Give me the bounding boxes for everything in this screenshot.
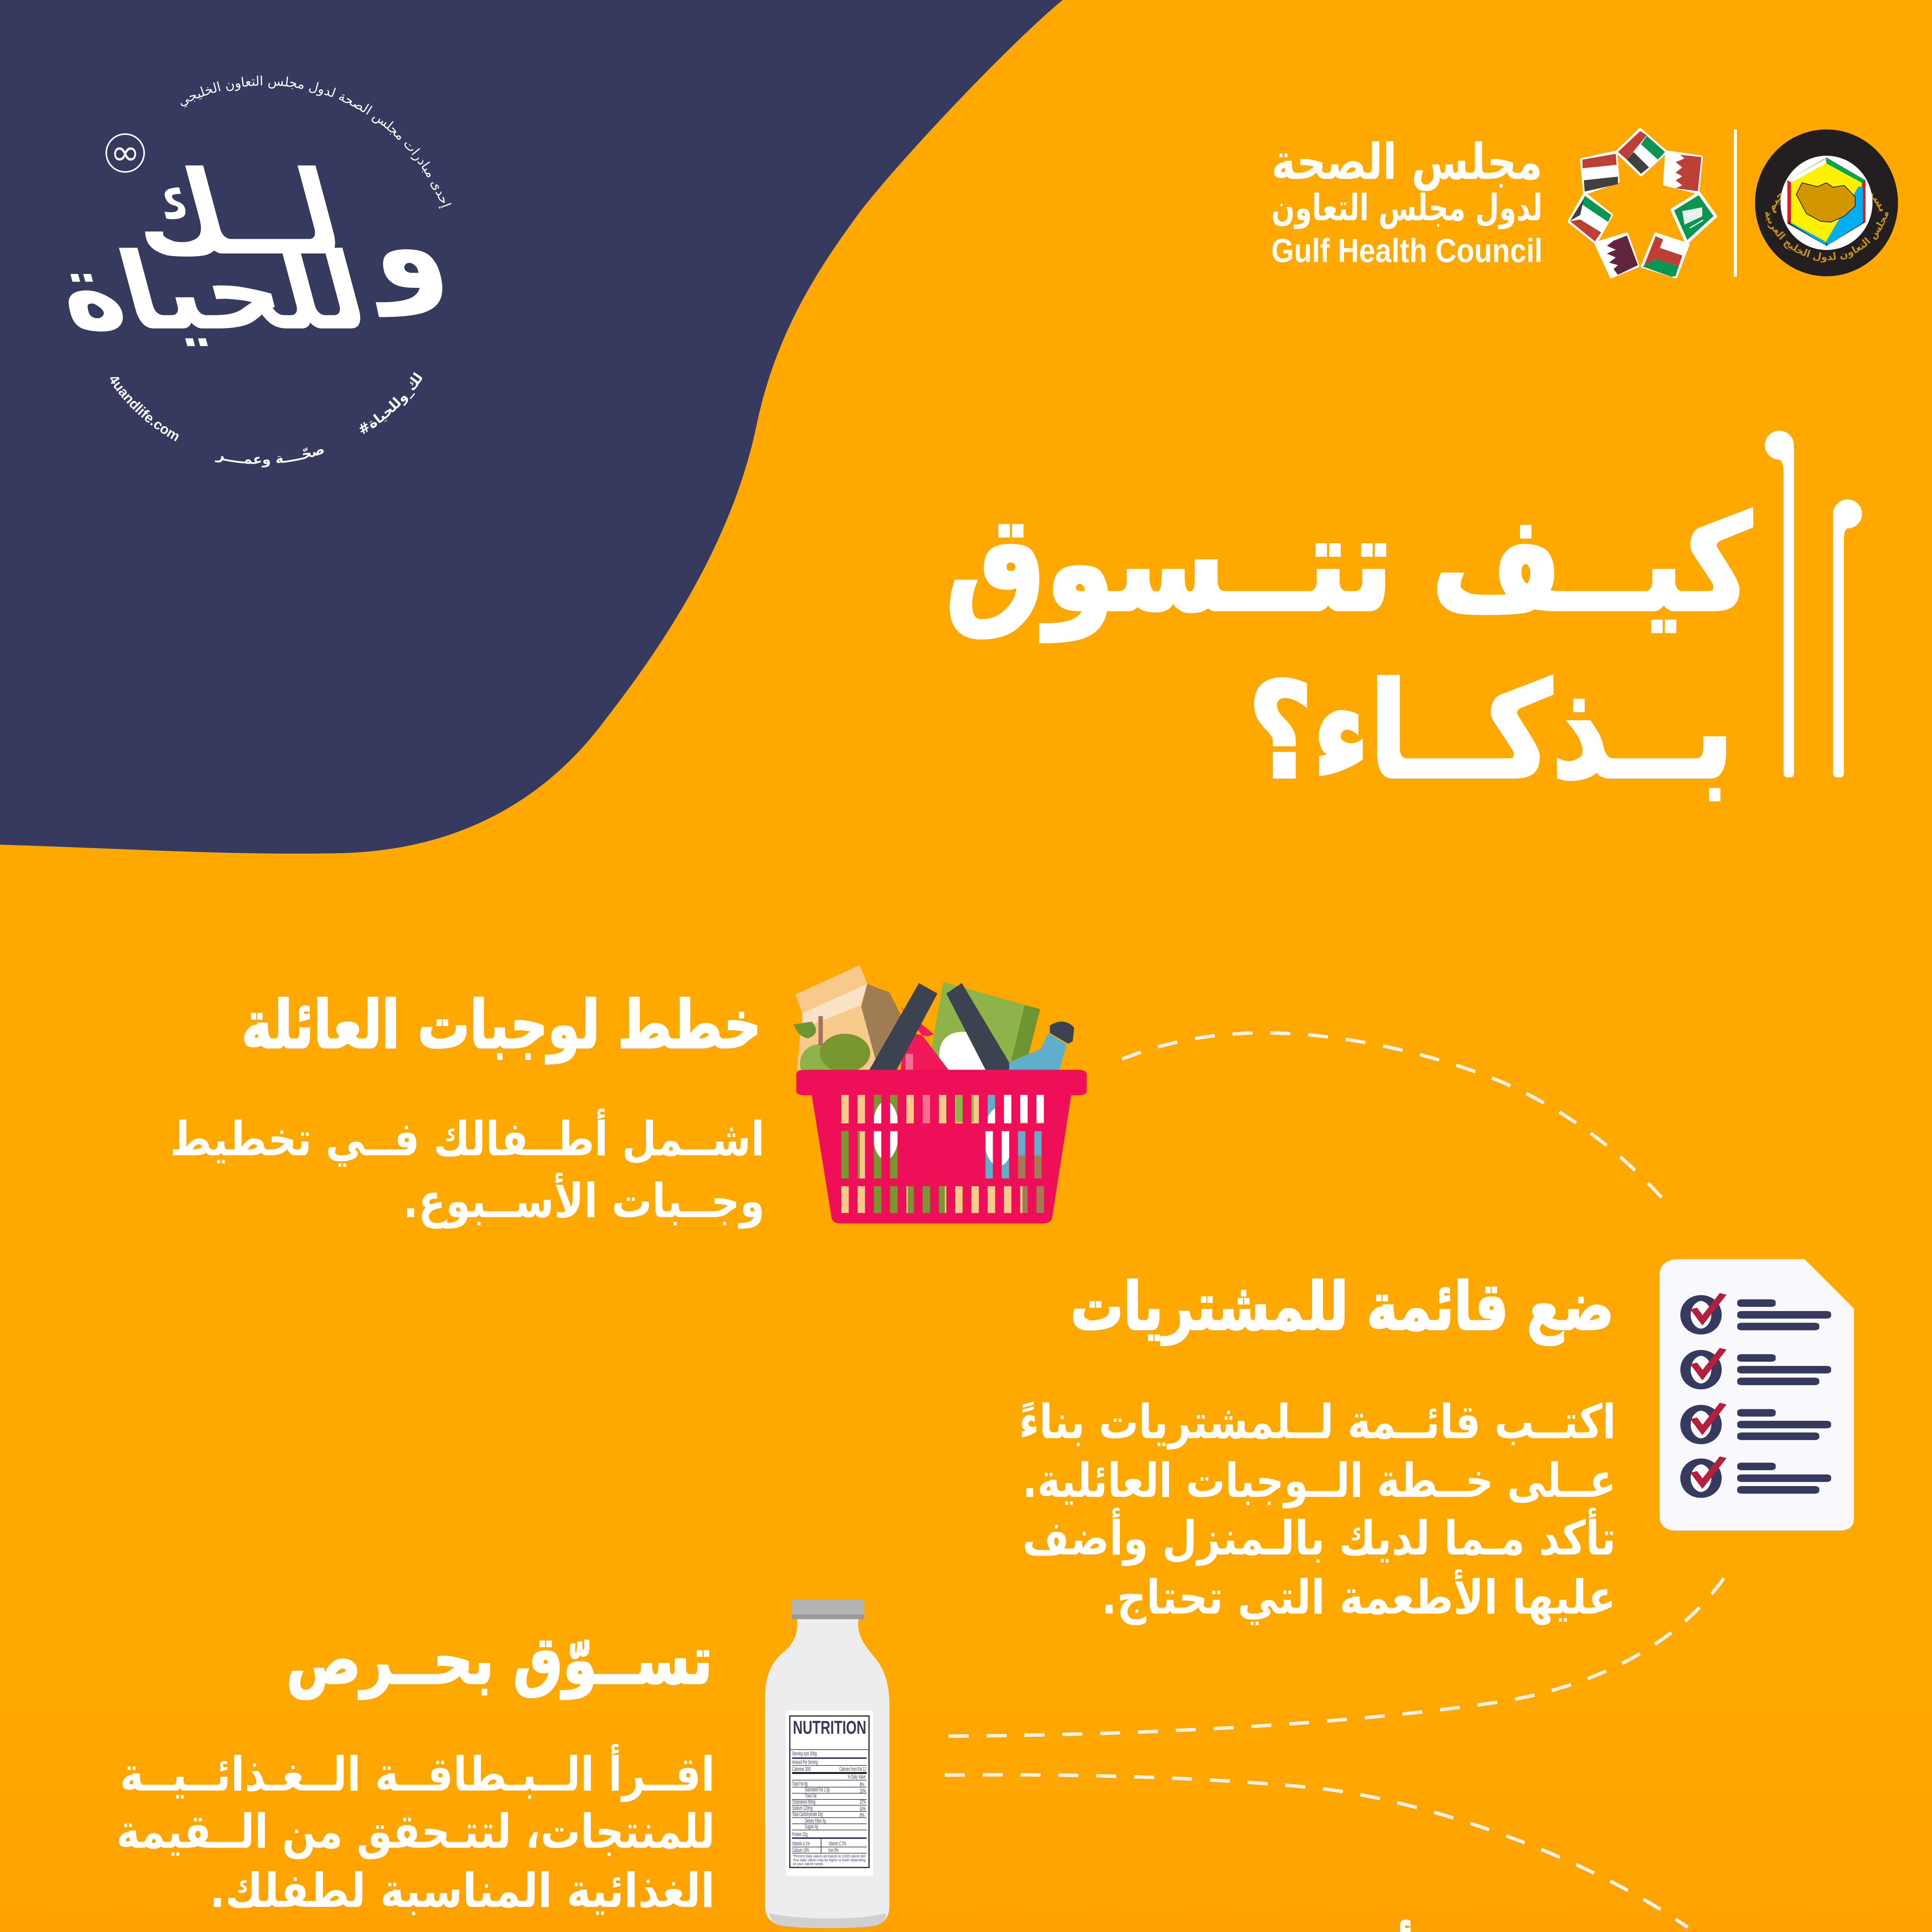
- icon: milk bottle with nutrition label: Calories 300: [792, 1766, 811, 1772]
- body text: [1019, 1395, 1616, 1625]
- icon: milk bottle with nutrition label: Iron 0%: [828, 1847, 838, 1854]
- icon: checklist paper: [1660, 1259, 1854, 1531]
- body text: للمنتجات، لتتـحقق من الــقيمة: [116, 1804, 715, 1859]
- icon: milk bottle with nutrition label: Cholesterol 60mg: [792, 1799, 815, 1805]
- section: plan family meals: [170, 965, 1087, 1229]
- title line 1: كيــف تتــسوق: [946, 488, 1753, 642]
- icon: milk bottle with nutrition label: Vitamin C 2%: [828, 1840, 846, 1847]
- heading: تســوّق بحــرص: [286, 1622, 713, 1699]
- logo ring text hashtag: #لك_وللحياة: [355, 370, 427, 438]
- icon: milk bottle with nutrition label: Saturated Fat 1.3g: [805, 1786, 830, 1793]
- icon: milk bottle with nutrition label: NUTRITION: [793, 1718, 866, 1738]
- body text: عليها الأطعمة التي تحتاج.: [1101, 1569, 1616, 1625]
- icon: milk bottle with nutrition label: 8%: [860, 1812, 864, 1818]
- body text: تأكد مـما لديك بالـمنزل وأضف: [1022, 1508, 1616, 1566]
- icon: milk bottle with nutrition label: Trans Fat: [805, 1793, 816, 1799]
- logo ring text website: 4uandlife.com: [105, 372, 183, 444]
- icon: milk bottle with nutrition label: Serving size 200g: [792, 1750, 817, 1757]
- icon: infinity badge: ∞: [111, 132, 140, 173]
- icon: milk bottle with nutrition label: Sodium 120mg: [792, 1805, 813, 1811]
- icon: grocery basket: [793, 965, 1087, 1223]
- body text: الغذائية المناسبة لطفلك.: [209, 1863, 715, 1918]
- icon: milk bottle with nutrition label: Total Carbohydrate 10g: [792, 1811, 823, 1818]
- header logos: [1271, 129, 1898, 277]
- icon: GCC emblem: [1755, 129, 1898, 276]
- divider line: [1734, 129, 1737, 277]
- body text: وجــبات الأســبوع.: [403, 1172, 765, 1229]
- icon: milk bottle with nutrition label: Your daily values may be higher or lower depending: [793, 1858, 866, 1862]
- body text: [170, 1109, 765, 1229]
- dashed connector 3: [945, 1775, 1688, 1927]
- icon: milk bottle with nutrition label: *Percent Daily values are based on 3,000 calorie diet.: [793, 1854, 866, 1859]
- icon: milk bottle with nutrition label: Protein 22g: [792, 1831, 808, 1838]
- body text: اقــرأ الــبـطاقــة الــغـذائــيــة: [120, 1744, 715, 1802]
- icon: milk bottle with nutrition label: Vitamin A 1%: [792, 1840, 810, 1847]
- section: write a list: [1019, 1259, 1854, 1625]
- logo wordmark: و: [349, 177, 458, 318]
- title block: [946, 430, 1862, 808]
- header title: Gulf Health Council: Gulf Health Council: [1271, 232, 1543, 269]
- icon: milk bottle with nutrition label: Total Fat 8g: [792, 1781, 808, 1787]
- icon: milk bottle with nutrition label: [765, 1599, 889, 1928]
- icon: GCC emblem: مجلس التعاون لدول الخليج العربية: [1762, 209, 1891, 263]
- panel: navy corner shape: [0, 0, 1063, 854]
- header title: Gulf Health Council: مجلس الصحة: [1271, 133, 1543, 191]
- icon: milk bottle with nutrition label: Amount Per Serving: [792, 1759, 818, 1765]
- icon: milk bottle with nutrition label: Calcium 10%: [792, 1847, 809, 1854]
- body text: عــلى خــطة الــوجبات العائلية.: [1022, 1453, 1616, 1509]
- icon: milk bottle with nutrition label: 22%: [860, 1799, 866, 1805]
- heading: ضع قائمة للمشتريات: [1070, 1269, 1614, 1345]
- heading: خطط لوجبات العائلة: [242, 987, 761, 1064]
- icon: milk bottle with nutrition label: 8%: [860, 1781, 864, 1788]
- icon: milk bottle with nutrition label: Calories from Fat 12: [839, 1766, 866, 1772]
- icon: milk bottle with nutrition label: 20%: [860, 1787, 866, 1794]
- body text: اشــمل أطــفالك فــي تخطيط: [170, 1109, 765, 1167]
- header title: Gulf Health Council: لدول مجلس التعاون: [1271, 187, 1543, 229]
- logo wordmark: [43, 146, 458, 354]
- icon: milk bottle with nutrition label: % Daily Value: [848, 1774, 866, 1780]
- logo: 4 and life: [43, 73, 458, 468]
- dashed connector 1: [1122, 1033, 1665, 1202]
- dashed connector 2: [949, 1571, 1728, 1736]
- title decoration: two tall bars: [1765, 430, 1862, 777]
- logo wordmark: للحياة: [43, 230, 380, 354]
- icon: GCC emblem: بسم الله الرحمن الرحيم: [1764, 166, 1890, 214]
- icon: milk bottle with nutrition label: Sugars 4g: [805, 1823, 818, 1830]
- icon: milk bottle with nutrition label: Dietary Fiber 5g: [805, 1818, 826, 1824]
- section: shop carefully: [116, 1599, 889, 1928]
- icon: seven flags star: [1569, 129, 1716, 277]
- header title: Gulf Health Council: [1271, 133, 1543, 269]
- icon: milk bottle with nutrition label: 50%: [860, 1806, 866, 1812]
- icon: milk bottle with nutrition label: on your calorie needs.: [793, 1862, 824, 1866]
- logo ring text top: إحدى مبادرات مجلس الصحة لدول مجلس التعاون الخليجي: [175, 73, 454, 210]
- logo wordmark: لــك: [114, 146, 355, 281]
- body text: اكتــب قائــمة لــلمشتريات بناءً: [1019, 1395, 1616, 1450]
- title line 2: بــذكــاء؟: [1248, 655, 1734, 808]
- logo ring text tagline: صحّــــة وعمــــر: [214, 441, 327, 468]
- body text: [116, 1744, 715, 1918]
